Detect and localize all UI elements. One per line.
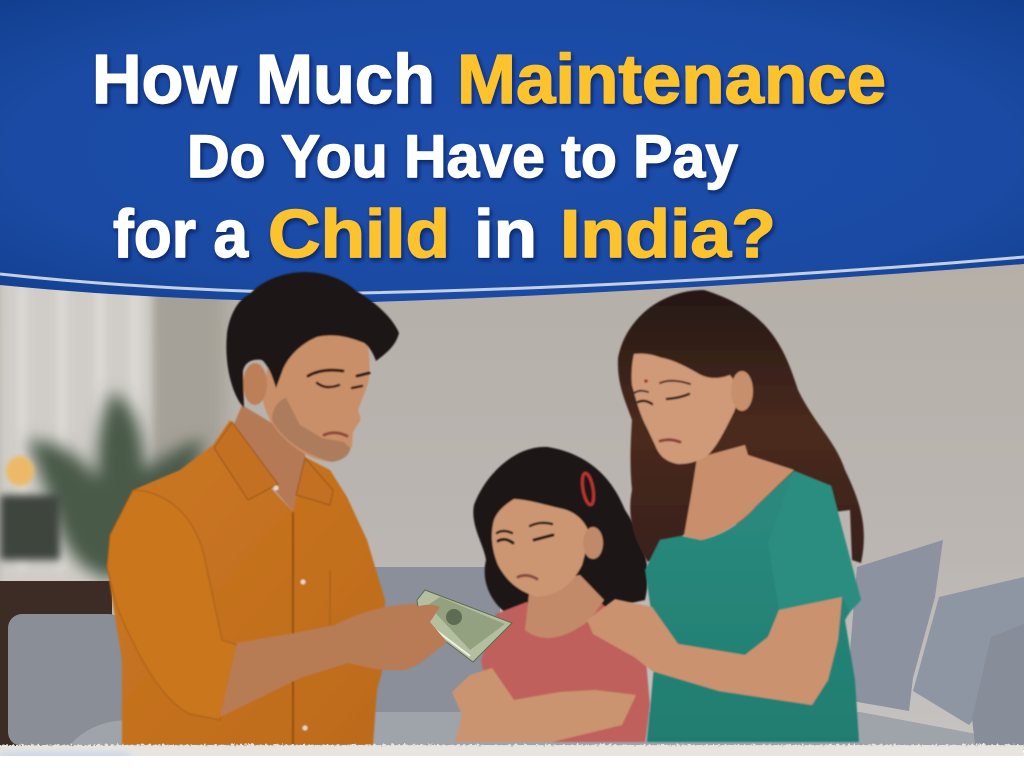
sofa: [8, 540, 1024, 746]
bottom white strip: [0, 745, 1024, 768]
woman shirt: [645, 471, 861, 742]
woman hair: [618, 290, 864, 563]
child: [452, 447, 650, 742]
side table: [0, 581, 112, 746]
man arm and hand: [220, 604, 445, 717]
woman sleeve: [768, 471, 861, 612]
man hair: [226, 272, 399, 408]
child arm and hands: [452, 668, 636, 742]
man ear: [243, 363, 267, 405]
banner line: [0, 257, 1024, 293]
man collar: [214, 422, 333, 505]
title line 1: [92, 40, 886, 118]
title line 3: for a: [113, 196, 249, 272]
child face: [492, 499, 590, 597]
man face: [262, 334, 370, 462]
child shirt: [481, 602, 650, 742]
man shirt: [107, 420, 385, 745]
background room: [0, 260, 1024, 750]
man hand over money: [388, 605, 447, 670]
title line 1: Maintenance: [457, 40, 886, 118]
man eyes and mouth: [308, 370, 369, 436]
title: [92, 40, 886, 272]
child ear: [583, 527, 603, 559]
woman eyes and mouth: [634, 381, 690, 442]
title line 1: How Much: [92, 40, 435, 118]
woman ear: [731, 371, 753, 411]
title line 2: Do You Have to Pay: [187, 123, 739, 190]
title line 3: Child: [268, 196, 450, 272]
title line 3: in: [474, 196, 537, 272]
title line 3: India?: [560, 196, 776, 272]
plant and lamp: [0, 392, 203, 580]
woman face: [632, 354, 742, 464]
woman chest and neck: [684, 445, 794, 540]
title line 3: [113, 196, 776, 272]
child hair: [473, 447, 648, 612]
woman arm and hand: [587, 597, 842, 705]
child eyes and mouth: [497, 523, 553, 579]
money: [417, 590, 512, 662]
hair clip: [580, 472, 596, 506]
shirt sleeve: [107, 490, 237, 720]
woman: [587, 290, 864, 742]
child neck: [525, 575, 604, 638]
man neck: [234, 405, 310, 512]
banner: [0, 0, 1024, 302]
man: [107, 272, 445, 745]
